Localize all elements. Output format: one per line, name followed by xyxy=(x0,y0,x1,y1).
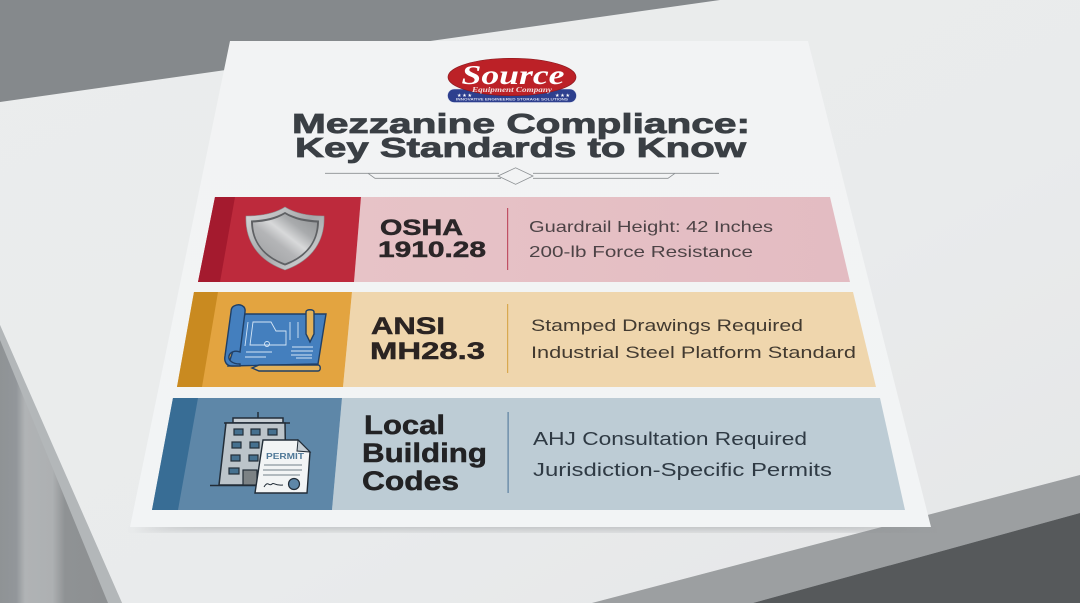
logo: Source Equipment Company: Equipment Company xyxy=(471,86,553,94)
icon: building with permit xyxy=(210,412,310,493)
panel: OSHA 1910.28 xyxy=(198,197,850,282)
background: dark floor lower right xyxy=(600,513,1080,603)
accent strip xyxy=(177,292,218,387)
icon: building with permit: PERMIT xyxy=(266,452,304,461)
title: Mezzanine Compliance: xyxy=(292,108,750,139)
icon: blueprint and pencils xyxy=(225,305,326,371)
standard name: OSHA xyxy=(380,215,463,240)
requirements xyxy=(531,316,856,362)
standard name: MH28.3 xyxy=(370,338,485,365)
standard name: 1910.28 xyxy=(378,237,486,262)
standard name: ANSI xyxy=(371,313,445,340)
band background xyxy=(332,398,905,510)
requirements: Industrial Steel Platform Standard xyxy=(531,343,856,362)
panel: ANSI MH28.3 xyxy=(177,292,876,387)
requirements: Guardrail Height: 42 Inches xyxy=(529,219,773,236)
icon panel xyxy=(152,398,342,510)
background: table leg lower left xyxy=(0,320,125,603)
standard name: Local xyxy=(364,410,445,440)
divider xyxy=(507,208,508,270)
title xyxy=(292,108,750,163)
icon: silver shield xyxy=(246,207,324,270)
standard name xyxy=(362,410,487,496)
paper shadow xyxy=(130,515,937,531)
logo: Source Equipment Company xyxy=(448,58,576,102)
requirements xyxy=(533,429,832,480)
divider xyxy=(507,304,508,373)
standard name xyxy=(370,313,485,365)
logo: Source Equipment Company: ★★★ xyxy=(457,93,473,99)
requirements: AHJ Consultation Required xyxy=(533,429,807,449)
icon panel xyxy=(177,292,352,387)
table left edge face xyxy=(0,325,122,603)
accent strip xyxy=(152,398,198,510)
divider xyxy=(508,412,509,493)
title divider ornament xyxy=(325,168,719,184)
standard name: Codes xyxy=(362,466,459,496)
table side face lower right xyxy=(592,475,1080,603)
accent strip xyxy=(198,197,235,282)
logo: Source Equipment Company: INNOVATIVE ENGINEERED STORAGE SOLUTIONS xyxy=(456,98,568,102)
requirements xyxy=(529,219,773,261)
standard name: Building xyxy=(362,438,487,468)
icon panel xyxy=(198,197,361,282)
logo: Source Equipment Company: ★★★ xyxy=(555,93,571,99)
paper sheet xyxy=(130,41,931,527)
requirements: Stamped Drawings Required xyxy=(531,316,803,335)
requirements: Jurisdiction-Specific Permits xyxy=(533,460,832,480)
band background xyxy=(354,197,850,282)
title: Key Standards to Know xyxy=(295,132,746,163)
logo: Source Equipment Company: Source xyxy=(462,60,565,90)
panel: Local Building Codes xyxy=(152,398,905,510)
band background xyxy=(343,292,876,387)
standard name xyxy=(378,215,486,262)
requirements: 200-lb Force Resistance xyxy=(529,244,753,261)
